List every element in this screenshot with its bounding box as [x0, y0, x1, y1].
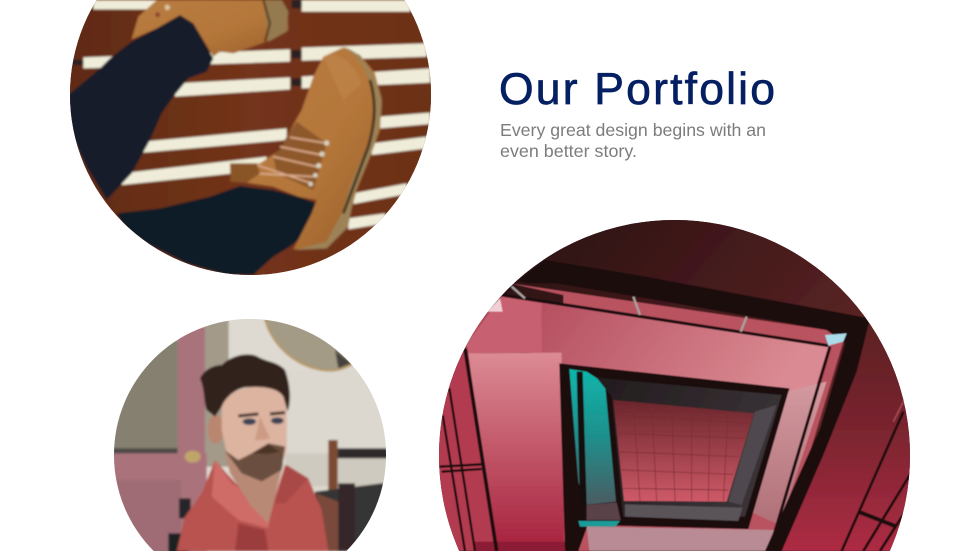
lower leg in dark jeans — [117, 186, 317, 275]
teal wall — [569, 369, 616, 505]
right railing — [840, 411, 910, 551]
chair — [328, 440, 338, 493]
upper leg in dark jeans — [68, 15, 213, 200]
large pink panel — [468, 353, 564, 543]
lower frame and floor — [625, 504, 743, 521]
tagline — [500, 120, 766, 161]
pink band above railing — [510, 283, 843, 551]
ceiling — [482, 220, 866, 498]
neck — [225, 453, 283, 523]
tagline: Every great design begins with an — [500, 120, 766, 140]
right wall — [781, 324, 910, 551]
left railing — [465, 348, 497, 551]
grey inner frame — [597, 378, 782, 517]
face — [220, 385, 288, 461]
hair — [200, 354, 290, 417]
upper boot — [132, 0, 288, 57]
title: Our Portfolio — [499, 65, 775, 114]
dark beam — [517, 260, 870, 551]
tagline: even better story. — [500, 141, 637, 161]
railing bars — [502, 295, 830, 548]
pink upper wall — [463, 295, 828, 395]
black inner frame — [559, 363, 789, 551]
boot laces and eyelets — [273, 122, 327, 190]
room background — [114, 319, 386, 551]
tiled window — [613, 400, 754, 502]
eyes and brows — [238, 413, 285, 425]
photo: man portrait circle — [114, 319, 386, 551]
photo: red stairwell circle — [439, 220, 910, 551]
wood slats and bright gaps — [60, 0, 440, 277]
stair step highlight — [487, 298, 503, 312]
lower boot — [230, 47, 382, 249]
far left wall — [439, 346, 494, 551]
heading and tagline — [499, 65, 775, 161]
ear — [208, 415, 224, 444]
shirt — [177, 460, 328, 551]
right pale wall — [750, 382, 827, 525]
photo: boots circle — [70, 0, 431, 275]
door — [114, 340, 180, 450]
